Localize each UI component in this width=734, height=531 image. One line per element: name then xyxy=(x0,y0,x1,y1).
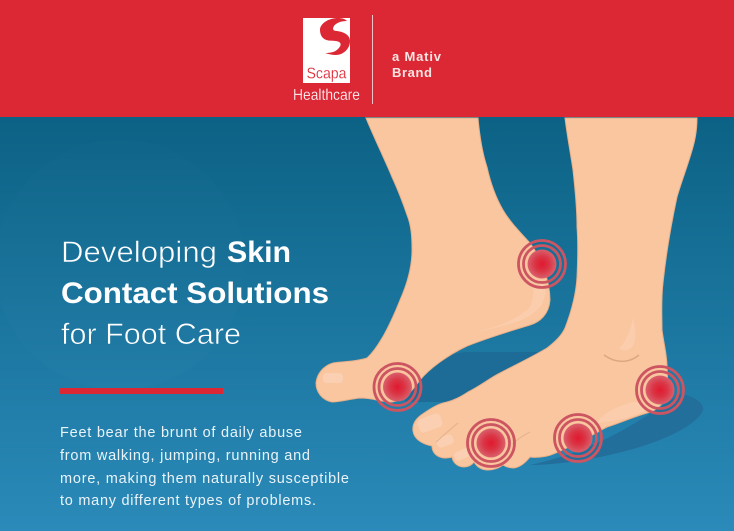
pain target: front heel xyxy=(636,366,684,414)
body text: to many different types of problems. xyxy=(60,493,316,509)
big toenail xyxy=(416,412,444,434)
ankle crease xyxy=(604,355,639,361)
shadow under front foot xyxy=(530,394,703,465)
logo word Scapa: Scapa xyxy=(306,66,347,82)
pain target: front toes xyxy=(468,420,514,466)
back heel highlight xyxy=(473,283,545,332)
toe crease 2 xyxy=(512,432,530,444)
body text: more, making them naturally susceptible xyxy=(60,471,349,487)
red accent rule xyxy=(60,388,223,394)
logo S mark xyxy=(320,18,350,55)
brand text xyxy=(392,49,442,80)
back foot xyxy=(316,118,550,402)
logo: Scapa Healthcare xyxy=(293,18,360,104)
back foot toenail xyxy=(323,373,343,383)
body text: from walking, jumping, running and xyxy=(60,448,310,464)
shadow between feet xyxy=(405,352,542,402)
title xyxy=(61,236,329,351)
logo white tile xyxy=(303,18,350,83)
body text: Feet bear the brunt of daily abuse xyxy=(60,425,302,441)
pain target: back heel xyxy=(518,240,566,288)
logo word Healthcare: Healthcare xyxy=(293,87,360,104)
title line 2: Contact Solutions xyxy=(61,277,329,310)
title line 3: for Foot Care xyxy=(61,318,241,351)
second toenail xyxy=(435,433,455,449)
body text xyxy=(60,425,349,509)
third toenail xyxy=(453,447,471,462)
title line 1 xyxy=(61,236,291,269)
title line 1: Skin xyxy=(227,236,291,269)
front foot shape xyxy=(413,118,697,470)
front foot xyxy=(413,118,697,470)
toe crease 1 xyxy=(436,423,458,442)
background panel xyxy=(0,117,734,531)
outer foot highlight xyxy=(597,402,647,423)
brand text: Brand xyxy=(392,65,432,80)
pain target: front ball of foot xyxy=(554,414,602,462)
decorative faint circle xyxy=(0,140,245,390)
brand text: a Mativ xyxy=(392,49,442,64)
header divider xyxy=(372,15,373,104)
header band xyxy=(0,0,734,117)
title line 1: Developing xyxy=(61,236,217,269)
back foot shape xyxy=(316,118,550,402)
ankle highlight xyxy=(619,318,635,350)
pain target: back toe joint xyxy=(374,364,421,410)
